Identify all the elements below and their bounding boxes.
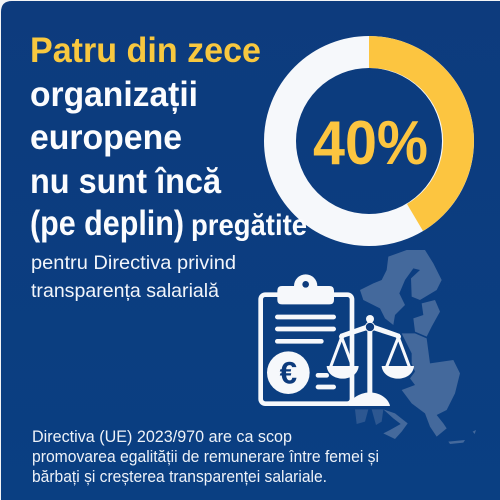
- description: line 2: promovarea egalității de remunerare între femei și: [32, 448, 379, 466]
- description: line 3: bărbați și creșterea transparenței salariale.: [32, 468, 327, 486]
- title: line 3: europene: [30, 118, 182, 157]
- subtitle: line 2: transparența salarială: [31, 280, 219, 302]
- description text: [32, 428, 379, 486]
- icon: clipboard: [261, 274, 352, 404]
- donut chart: [280, 36, 474, 231]
- description: line 1: Directiva (UE) 2023/970 are ca scop: [32, 428, 292, 446]
- subtitle: [31, 252, 236, 302]
- subtitle: line 1: pentru Directiva privind: [31, 252, 236, 274]
- icon: euro coin: €: [280, 356, 297, 391]
- title: line 5 end: pregătite: [191, 209, 307, 242]
- title: [30, 31, 307, 243]
- donut: remaining share: [280, 52, 458, 230]
- title: highlighted line: Patru din zece: [30, 31, 261, 70]
- title: line 4: nu sunt încă: [30, 162, 221, 201]
- map of Europe: [355, 250, 476, 444]
- donut: 40% segment: [369, 36, 474, 231]
- donut value: 40%: [313, 109, 428, 178]
- title: line 5 start: (pe deplin): [30, 204, 184, 243]
- icon: clipboard with euro and scales: [261, 274, 414, 406]
- icon: balance scales: [327, 315, 414, 406]
- icon: euro coin: [267, 351, 310, 394]
- title: line 2: organizații: [30, 75, 198, 114]
